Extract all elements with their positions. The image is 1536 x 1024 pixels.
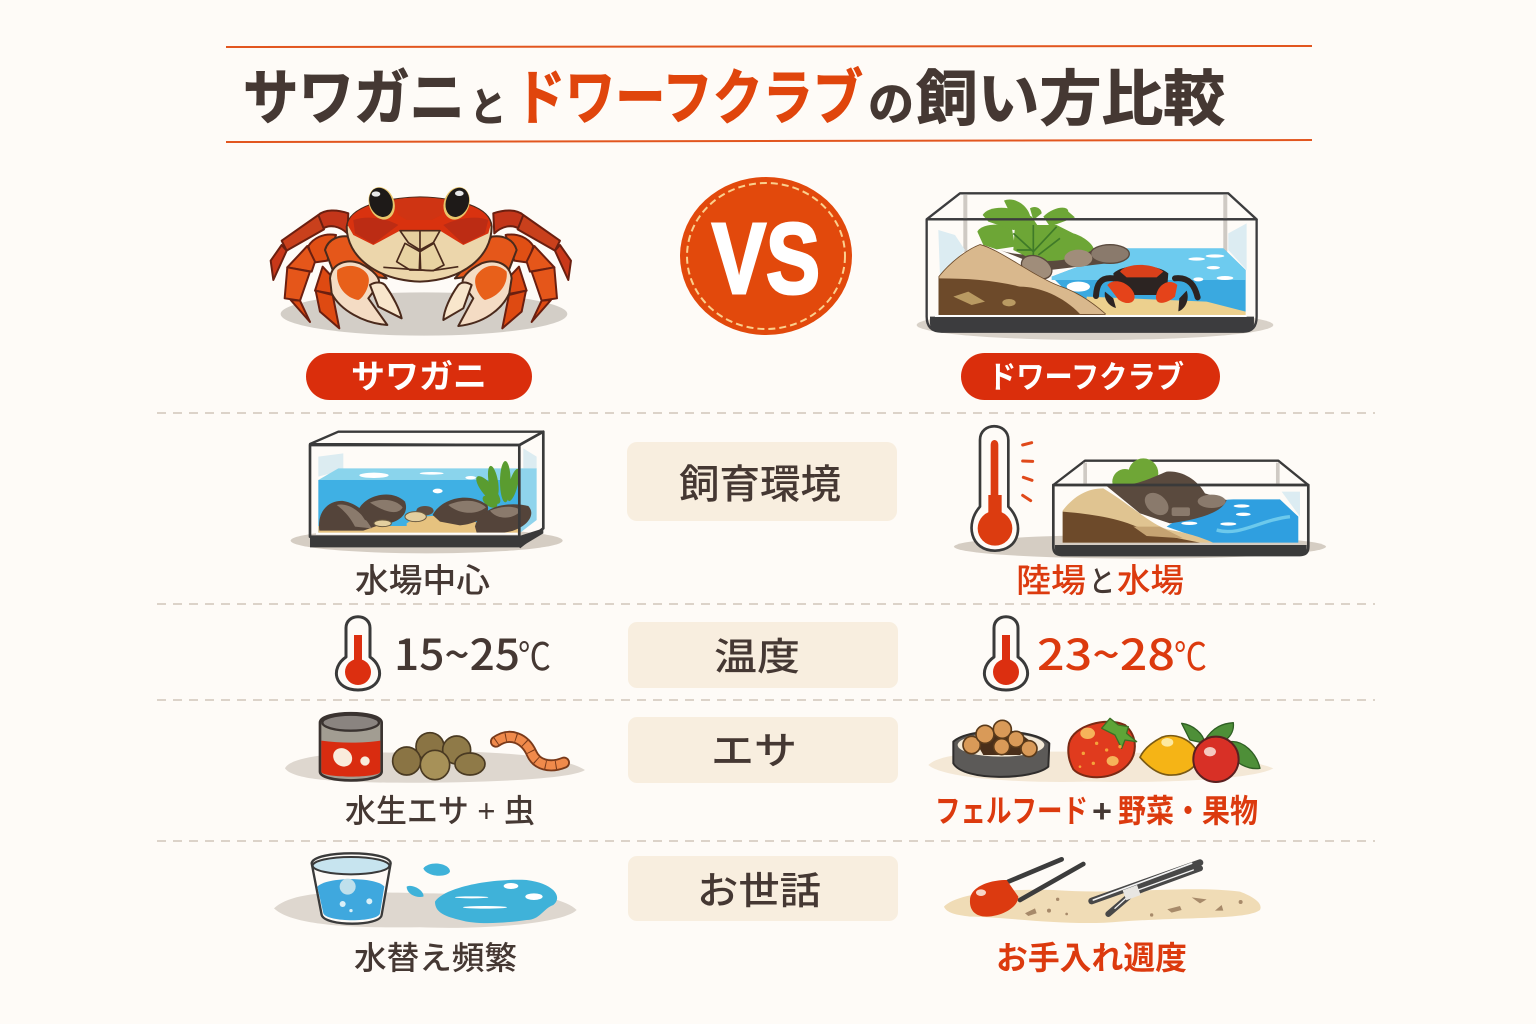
title: サワガニ (243, 65, 465, 132)
VS badge (680, 177, 852, 335)
illustration: sawagani crab (271, 183, 571, 336)
row 3 label: エサ (711, 731, 797, 773)
text: dwarf crab habitat: 水場 (1117, 562, 1184, 599)
pill: sawagani (306, 353, 532, 400)
text: dwarf crab habitat: 陸場 (1016, 562, 1086, 599)
title: の (868, 78, 914, 130)
row 4 label: お世話 (697, 871, 821, 913)
title: と (470, 86, 506, 130)
text: dwarf crab habitat: と (1089, 566, 1115, 599)
pill: dwarf crab (961, 353, 1220, 400)
illustration: tongs and tweezers on sand (944, 859, 1261, 923)
VS badge: VS (712, 203, 820, 315)
text: temperature right: ℃ (1174, 626, 1207, 681)
row 1 label: 飼育環境 (679, 463, 841, 507)
text: dwarf crab care: お手入れ週度 (996, 940, 1187, 976)
text: temperature left: ℃ (518, 626, 551, 681)
text: sawagani habitat: 水場中心 (355, 562, 490, 599)
row 3 label (628, 717, 898, 783)
illustration: thermometer and land-water tank (954, 426, 1326, 559)
text: sawagani food: 水生エサ + 虫 (345, 793, 535, 829)
row 2 label: 温度 (714, 637, 800, 679)
text: dwarf crab food (935, 793, 1258, 829)
illustration: pellet, strawberry, lemon (928, 718, 1273, 782)
pill: sawagani: サワガニ (351, 358, 487, 395)
title (243, 65, 1225, 133)
icon: thermometer right (984, 617, 1028, 690)
icon: thermometer left (336, 617, 380, 690)
text: dwarf crab food: 野菜・果物 (1118, 793, 1258, 829)
text: temperature right: 23~28 (1037, 621, 1175, 683)
row 1 label (627, 442, 897, 521)
illustration: water tank (291, 432, 563, 553)
text: dwarf crab food: フェルフード (935, 793, 1088, 829)
illustration: dwarf crab terrarium (917, 193, 1273, 340)
text: dwarf crab food: + (1092, 793, 1112, 829)
row 2 label (628, 622, 898, 688)
row 4 label (628, 856, 898, 921)
illustration: aquatic food and worm (274, 713, 585, 928)
title: ドワーフクラブ (515, 65, 863, 132)
text: dwarf crab habitat (1016, 562, 1184, 599)
title: 飼い方比較 (916, 66, 1225, 133)
pill: dwarf crab: ドワーフクラブ (988, 360, 1184, 395)
text: sawagani care: 水替え頻繁 (354, 940, 517, 976)
text: temperature left: 15~25 (394, 621, 520, 683)
